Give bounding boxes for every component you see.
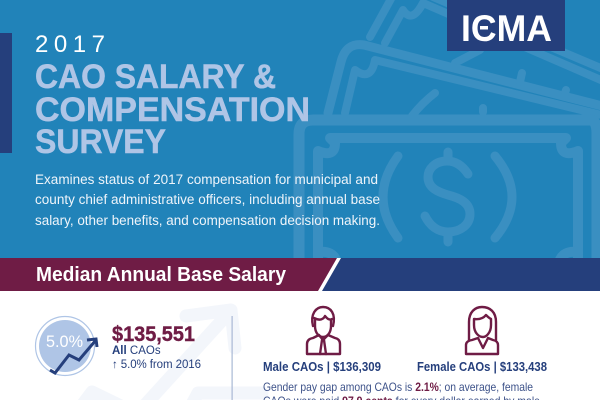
all CAOs salary: $135,551 [112, 323, 195, 346]
icon: male CAO [307, 307, 340, 354]
logo: ICMA [447, 0, 565, 51]
description: Examines status of 2017 compensation for municipal and [35, 172, 378, 187]
hero background [0, 0, 600, 258]
background arrows watermark [80, 310, 262, 400]
male salary label: Male CAOs | $136,309 [263, 360, 381, 374]
female salary label: Female CAOs | $133,438 [417, 360, 547, 374]
title: SURVEY [35, 123, 166, 161]
icon: female CAO [466, 307, 498, 354]
icon: money bills watermark [299, 0, 600, 262]
section banner [0, 258, 600, 291]
title: CAO SALARY & [35, 58, 276, 96]
all CAOs salary: ↑ 5.0% from 2016 [112, 359, 201, 371]
gender pay gap text: Gender pay gap among CAOs is 2.1%; on average, female [263, 380, 533, 394]
description: county chief administrative officers, including annual base [35, 192, 380, 207]
icon: growth circle: 5.0% [46, 332, 83, 351]
heading: Median Annual Base Salary [36, 264, 287, 286]
title [35, 58, 310, 161]
description [35, 172, 380, 228]
all CAOs salary [112, 323, 201, 371]
column divider [232, 316, 233, 400]
gender pay gap text [263, 380, 540, 400]
icon: growth circle [36, 316, 97, 376]
title: COMPENSATION [35, 91, 310, 129]
description: salary, other benefits, and compensation decision making. [35, 213, 380, 228]
all CAOs salary: All CAOs [112, 345, 161, 357]
year label: 2017 [35, 31, 105, 58]
logo: ICMA: ICMA [461, 8, 552, 49]
accent bar [0, 33, 12, 153]
